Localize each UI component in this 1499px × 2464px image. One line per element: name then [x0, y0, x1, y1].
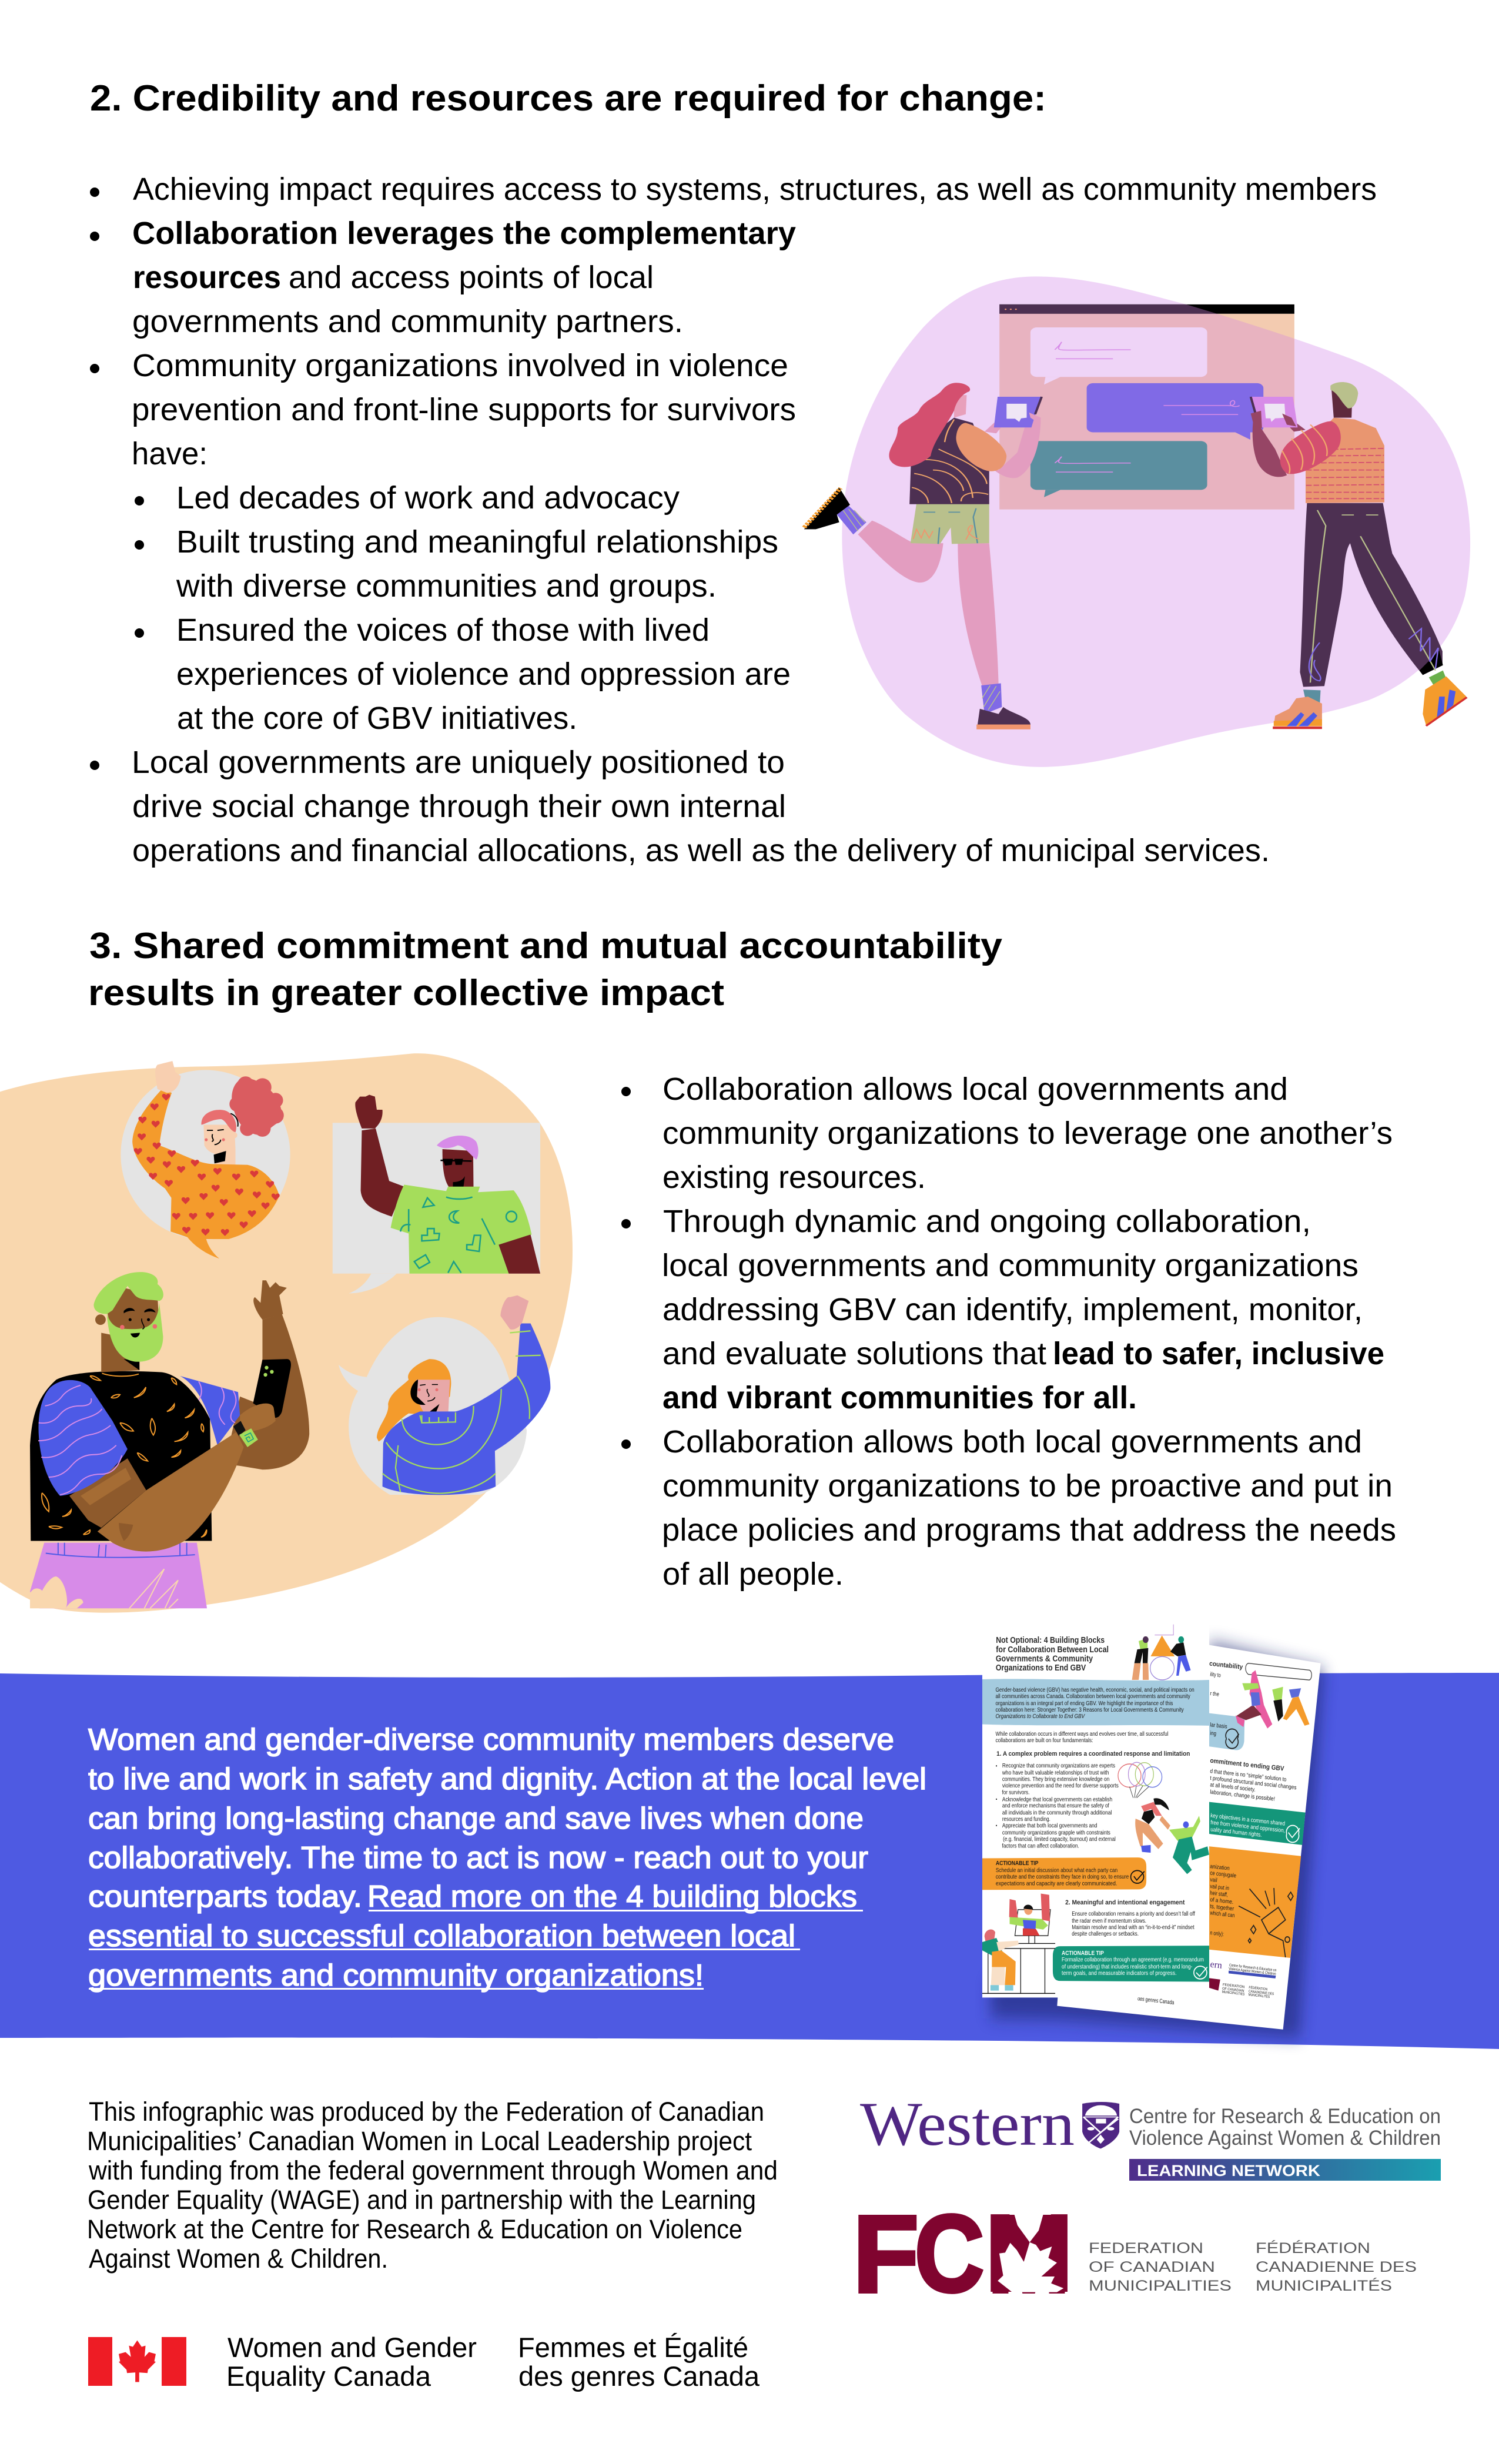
panel: blue call-to-action band: [0, 1673, 1499, 2049]
document page: back: OF CANADIAN: [1222, 1987, 1244, 1993]
logo: Women and Gender Equality Canada: des genres Canada: [518, 2361, 760, 2392]
text block: section 3 bullet list: lead to safer, inclusive: [1053, 1336, 1384, 1371]
document page: back: heir staff,: [1210, 1890, 1228, 1898]
text block: section 2 bullet list: with diverse communities and groups.: [176, 568, 717, 604]
document text: all communities across Canada. Collaboration between local governments and community: [995, 1693, 1190, 1699]
document title: Organizations to End GBV: [996, 1663, 1086, 1672]
text block: production credit: This infographic was produced by the Federation of Canadian: [89, 2097, 764, 2127]
actionable tip: green: term goals, and measurable indicators of progress.: [1062, 1970, 1176, 1976]
text block: call to action: to live and work in safety and dignity. Action at the local level: [88, 1762, 926, 1796]
actionable tip: orange: ACTIONABLE TIP: [996, 1860, 1038, 1866]
document text: section 2: Maintain resolve and lead with an “in-it-to-end-it” mindset: [1072, 1924, 1194, 1930]
text block: production credit: with funding from the federal government through Women and: [88, 2155, 778, 2185]
document page: back: Centre for Research & Education on: [1229, 1963, 1277, 1973]
text block: section 3 bullet list: existing resources.: [662, 1160, 926, 1195]
text block: section 2 bullet list: prevention and front-line supports for survivors: [132, 392, 796, 427]
actionable tip: orange: Schedule an initial discussion about what each party can: [996, 1867, 1117, 1873]
document page: back: n only):: [1210, 1930, 1224, 1937]
document text: Gender-based violence (GBV) has negative health, economic, social, and political impacts on: [995, 1686, 1194, 1693]
logo: Western University Learning Network: Western: [860, 2090, 1075, 2158]
logo: Western University Learning Network: [860, 2090, 1441, 2181]
document page: back: r the: [1210, 1690, 1219, 1698]
document text: section 2: Ensure collaboration remains a priority and doesn’t fall off: [1072, 1911, 1195, 1917]
actionable tip: orange: [982, 1857, 1146, 1890]
text block: section 2 bullet list: at the core of GBV initiatives.: [177, 701, 577, 736]
text block: section 3 bullet list: Through dynamic and ongoing collaboration,: [663, 1204, 1311, 1239]
document page: back: d that there is no “simple” solution to: [1210, 1768, 1287, 1783]
logo: Western University Learning Network: Violence Against Women & Children: [1129, 2127, 1441, 2150]
text block: call to action: collaboratively. The time to act is now - reach out to your: [88, 1841, 868, 1875]
text block: section 2 bullet list: drive social change through their own internal: [132, 789, 786, 824]
document page: back: ommitment to ending GBV: [1210, 1757, 1284, 1773]
text block: section 2 bullet list: have:: [132, 436, 208, 471]
text block: production credit: Against Women & Children.: [89, 2244, 388, 2274]
document page: back: MUNICIPALITIES: [1222, 1990, 1245, 1997]
document text: While collaboration occurs in different ways and evolves over time, all successful: [995, 1730, 1169, 1737]
document title: Governments & Community: [996, 1654, 1093, 1663]
actionable tip: orange: expectations and capacity are clearly communicated.: [996, 1880, 1117, 1886]
text block: section 2 bullet list: experiences of violence and oppression are: [176, 657, 791, 692]
illustration: people waving in speech bubbles over a peach blob: [0, 1053, 573, 1613]
document page: back: of a home.: [1210, 1896, 1234, 1905]
document illustration: person at a computer: [982, 1893, 1055, 1993]
logo: Women and Gender Equality Canada: Femmes et Égalité: [518, 2332, 748, 2363]
actionable tip: orange: contribute and the constraints they face in doing so, to ensure: [996, 1873, 1129, 1880]
document page: back: des genres Canada: [1137, 1996, 1175, 2006]
text block: section 3 bullet list: Collaboration allows both local governments and: [662, 1424, 1362, 1459]
text block: production credit: Gender Equality (WAGE) and in partnership with the Learning: [88, 2185, 756, 2215]
actionable tip: green: Formalize collaboration through an agreement (e.g. memorandum: [1062, 1957, 1204, 1963]
text block: production credit: Municipalities’ Canadian Women in Local Leadership project: [87, 2126, 752, 2156]
text block: section 2 bullet list: operations and financial allocations, as well as the delivery of municipal services.: [132, 833, 1270, 868]
illustration: preview of the building blocks document pages: [982, 1625, 1324, 2038]
document page: back: vail put in: [1210, 1883, 1229, 1891]
logo: Women and Gender Equality Canada: [88, 2332, 760, 2392]
document text: who have built valuable relationships of trust with: [1002, 1769, 1109, 1776]
logo: Federation of Canadian Municipalities: FEDERATION: [1089, 2240, 1203, 2257]
text block: section 2 bullet list: Local governments are uniquely positioned to: [132, 745, 785, 780]
document text: resources and funding.: [1002, 1816, 1050, 1822]
document text: section 2: despite challenges or setbacks.: [1072, 1931, 1139, 1937]
document page: back: lar basis: [1210, 1722, 1227, 1730]
person: woman with tablet: [804, 383, 1042, 729]
document text: organizations is an integral part of ending GBV. We highlight the importance of this: [995, 1700, 1173, 1706]
text block: section 2 bullet list: Led decades of work and advocacy: [176, 480, 680, 515]
document page: back: FEDERATION: [1223, 1983, 1245, 1989]
text block: section 3 bullet list: and vibrant communities for all.: [662, 1380, 1137, 1415]
document illustration: balloons with two people: [1118, 1762, 1209, 1874]
document page: back: free from violence and oppression,: [1210, 1819, 1285, 1834]
icon: Canadian flag: [88, 2337, 186, 2386]
document text: and enforce mechanisms that ensure the safety of: [1002, 1803, 1109, 1809]
text block: production credit: [87, 2097, 778, 2274]
text block: section 3 bullet list: and evaluate solutions that: [662, 1336, 1046, 1371]
person: man with tablet: [1251, 382, 1467, 729]
text block: section 2 bullet list: Community organizations involved in violence: [132, 348, 788, 383]
document title: Not Optional: 4 Building Blocks: [996, 1635, 1105, 1645]
document title: for Collaboration Between Local: [996, 1645, 1109, 1654]
logo: Women and Gender Equality Canada: Women and Gender: [227, 2332, 477, 2363]
text block: call to action: [88, 1723, 926, 1993]
document page: back: ce conjugale: [1210, 1870, 1237, 1879]
document page: back: CANADIENNE DES: [1249, 1990, 1274, 1996]
logo: Western University Learning Network: Centre for Research & Education on: [1129, 2105, 1441, 2128]
text block: call to action: can bring long-lasting change and save lives when done: [88, 1802, 864, 1836]
document title: [996, 1635, 1109, 1672]
document page: back: t profound structural and social changes: [1210, 1775, 1297, 1790]
logo: Federation of Canadian Municipalities: M: [988, 2194, 1070, 2315]
document page: back: uality and human rights.: [1210, 1826, 1262, 1838]
text block: call to action: essential to successful collaboration between local: [88, 1919, 795, 1953]
heading: section 2: 2. Credibility and resources are required for change:: [90, 78, 1046, 119]
document text: 1. A complex problem requires a coordinated response and limitation: [996, 1750, 1190, 1757]
document illustration: people with triangle and circle: [1132, 1625, 1191, 1680]
logo: Federation of Canadian Municipalities: MUNICIPALITÉS: [1256, 2277, 1392, 2294]
logo: Federation of Canadian Municipalities: F: [853, 2194, 919, 2315]
text block: call to action: governments and community organizations!: [88, 1959, 704, 1993]
document text: section 2: the radar even if momentum slows.: [1072, 1917, 1146, 1924]
heading: section 3: 3. Shared commitment and mutual accountability: [89, 926, 1003, 966]
text block: section 2 bullet list: Built trusting and meaningful relationships: [176, 524, 778, 560]
document page: back: FÉDÉRATION: [1249, 1986, 1267, 1992]
text block: section 3 bullet list: local governments and community organizations: [662, 1248, 1359, 1283]
document page: back: key objectives in a common shared: [1210, 1812, 1285, 1827]
text block: section 3 bullet list: place policies and programs that address the needs: [662, 1512, 1396, 1548]
logo: Federation of Canadian Municipalities: C: [915, 2193, 984, 2315]
logo: Federation of Canadian Municipalities: FÉDÉRATION: [1256, 2239, 1370, 2257]
document page: back: MUNICIPALITÉS: [1248, 1993, 1270, 1999]
actionable tip: green: of understanding) that includes realistic short-term and long-: [1062, 1963, 1192, 1970]
text block: section 3 bullet list: [621, 1072, 1396, 1592]
document page: back: [1057, 1625, 1321, 2030]
document text: communities. They bring extensive knowledge on: [1002, 1776, 1109, 1782]
text block: section 3 bullet list: of all people.: [662, 1556, 844, 1592]
text block: section 2 bullet list: Ensured the voices of those with lived: [176, 612, 710, 648]
text block: section 2 bullet list: governments and community partners.: [132, 304, 683, 339]
text block: section 2 bullet list: and access points of local: [289, 260, 654, 295]
document page: back: laboration, change is possible!: [1210, 1789, 1275, 1802]
document text: violence prevention and the need for diverse supports: [1002, 1783, 1119, 1789]
document page: back: at all levels of society.: [1210, 1782, 1256, 1793]
text block: section 3 bullet list: Collaboration allows local governments and: [662, 1072, 1288, 1107]
document page: back: Violence Against Women & Children: [1229, 1967, 1276, 1976]
text block: section 3 bullet list: addressing GBV can identify, implement, monitor,: [662, 1292, 1363, 1327]
document text: Acknowledge that local governments can establish: [1002, 1796, 1112, 1802]
text block: call to action: counterparts today.: [88, 1880, 362, 1914]
document text: (e.g. financial, limited capacity, burnout) and external: [1003, 1836, 1116, 1842]
document text: section 2: [1065, 1899, 1195, 1937]
chat window: [999, 304, 1294, 510]
text block: section 2 bullet list: [90, 172, 1377, 868]
text block: call to action: Read more on the 4 building blocks: [367, 1880, 857, 1914]
document text: factors that can affect collaboration.: [1002, 1843, 1079, 1849]
heading: section 3: [88, 926, 1003, 1013]
heading: section 3: results in greater collective impact: [88, 973, 724, 1013]
actionable tip: green: ACTIONABLE TIP: [1062, 1950, 1104, 1956]
document page: back: ing: [1210, 1730, 1216, 1737]
scroll with running figures: [1236, 1663, 1311, 1729]
document page: back: ern: [1210, 1960, 1223, 1971]
illustration: two people chatting on tablets over a purple blob: [804, 276, 1470, 767]
document text: Appreciate that both local governments and: [1002, 1823, 1097, 1829]
actionable tip: green: [1053, 1946, 1209, 1982]
document page: back: ts, together: [1210, 1903, 1234, 1912]
document page: back: anization: [1210, 1863, 1230, 1872]
person: woman in orange heart sweater: [121, 1061, 290, 1258]
person: woman in blue sweater: [339, 1295, 550, 1495]
text block: section 2 bullet list: Collaboration leverages the complementary: [132, 216, 796, 251]
document page: back: which all can: [1209, 1910, 1235, 1919]
logo: Federation of Canadian Municipalities: MUNICIPALITIES: [1089, 2278, 1232, 2294]
icon: Western shield: [1082, 2102, 1119, 2149]
logo: Western University Learning Network: LEARNING NETWORK: [1137, 2162, 1321, 2180]
text block: section 3 bullet list: community organizations to leverage one another’s: [662, 1116, 1393, 1151]
logo: Women and Gender Equality Canada: Equality Canada: [226, 2361, 431, 2392]
document page: front: [982, 1625, 1209, 1997]
logo: Federation of Canadian Municipalities: [853, 2193, 1417, 2315]
text block: call to action: Women and gender-diverse community members deserve: [88, 1723, 894, 1757]
document text: section 2: 2. Meaningful and intentional engagement: [1065, 1899, 1185, 1906]
document text: community organizations grapple with constraints: [1002, 1829, 1110, 1836]
icon: M block with maple leaf in FCM logo: [991, 2214, 1068, 2292]
person: bearded man taking a selfie: [30, 1272, 309, 1608]
text block: production credit: Network at the Centre for Research & Education on Violence: [87, 2214, 742, 2244]
text block: section 3 bullet list: community organizations to be proactive and put in: [662, 1468, 1393, 1504]
document text: Recognize that community organizations are experts: [1002, 1763, 1115, 1769]
text block: section 2 bullet list: resources: [133, 260, 281, 295]
document text: for survivors.: [1002, 1789, 1029, 1796]
document text: collaboration here: Stronger Together: 3 Reasons for Local Governments & Community: [995, 1706, 1184, 1713]
document text: Organizations to Collaborate to End GBV: [995, 1713, 1085, 1719]
text block: section 2 bullet list: Achieving impact requires access to systems, structures, as well as community members: [133, 172, 1377, 207]
document text: collaborations are built on four fundamentals:: [995, 1737, 1093, 1743]
logo: Federation of Canadian Municipalities: CANADIENNE DES: [1256, 2259, 1417, 2275]
document page: back: countability: [1209, 1660, 1243, 1671]
document text: all individuals in the community through additional: [1002, 1809, 1112, 1816]
document page: back: ility to: [1210, 1671, 1221, 1679]
document text: [995, 1686, 1194, 1849]
logo: Federation of Canadian Municipalities: OF CANADIAN: [1089, 2259, 1215, 2275]
person: man with sunglasses in green shirt: [333, 1094, 540, 1294]
document page: back: vail: [1210, 1876, 1217, 1883]
